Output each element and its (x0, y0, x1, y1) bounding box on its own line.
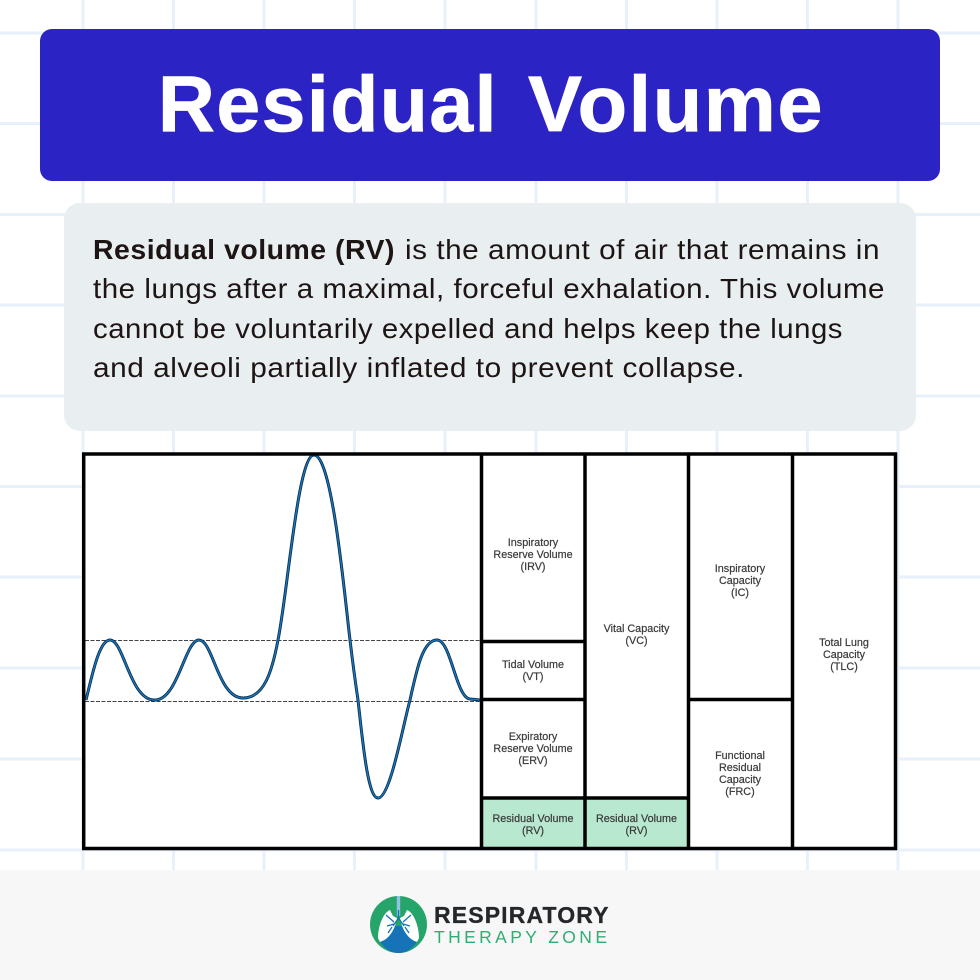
chart: lung volumes (84, 454, 896, 848)
definition text: is the amount of air that remains in (405, 234, 880, 265)
label: VC: (VC) (625, 635, 648, 647)
residual volume highlight cells (482, 798, 688, 848)
definition text: Residual volume (RV) (93, 234, 395, 265)
label: IRV: Inspiratory (508, 537, 559, 549)
logo tagline: THERAPY ZONE (434, 927, 607, 947)
label: RV column 2: (RV) (626, 825, 648, 837)
panel: definition (64, 203, 916, 431)
title: Volume (528, 59, 824, 148)
table labels (492, 537, 869, 837)
label: IRV: Reserve Volume (493, 549, 573, 561)
label: FRC: Residual (719, 762, 761, 774)
dashed reference lines (85, 640, 481, 702)
label: TLC: Total Lung (819, 637, 869, 649)
label: IC: Capacity (719, 575, 762, 587)
footer band (0, 870, 980, 980)
label: TLC: (TLC) (830, 661, 858, 673)
icon: lungs (370, 896, 427, 953)
logo (370, 896, 608, 953)
label: IC: (IC) (731, 587, 749, 599)
table grid (84, 454, 895, 848)
title (158, 59, 824, 148)
label: ERV: (ERV) (518, 755, 548, 767)
label: FRC: Capacity (719, 774, 762, 786)
label: IRV: (IRV) (520, 561, 546, 573)
definition text: and alveoli partially inflated to prevent collapse. (93, 352, 745, 383)
label: RV column 2: Residual Volume (596, 813, 677, 825)
definition text (93, 234, 885, 383)
label: FRC: Functional (715, 750, 765, 762)
label: FRC: (FRC) (725, 786, 755, 798)
title banner (40, 29, 940, 181)
label: TLC: Capacity (823, 649, 866, 661)
label: ERV: Expiratory (509, 731, 558, 743)
label: VC: Vital Capacity (604, 623, 670, 635)
definition text: cannot be voluntarily expelled and helps keep the lungs (93, 313, 843, 344)
breathing volume curve (86, 455, 480, 798)
label: VT: (VT) (522, 671, 544, 683)
label: RV column 1: (RV) (522, 825, 544, 837)
label: IC: Inspiratory (715, 563, 766, 575)
definition text: the lungs after a maximal, forceful exhalation. This volume (93, 273, 885, 304)
logo wordmark: RESPIRATORY (434, 902, 608, 928)
label: RV column 1: Residual Volume (492, 813, 574, 825)
label: VT: Tidal Volume (502, 659, 564, 671)
title: Residual (158, 59, 498, 148)
label: ERV: Reserve Volume (493, 743, 573, 755)
